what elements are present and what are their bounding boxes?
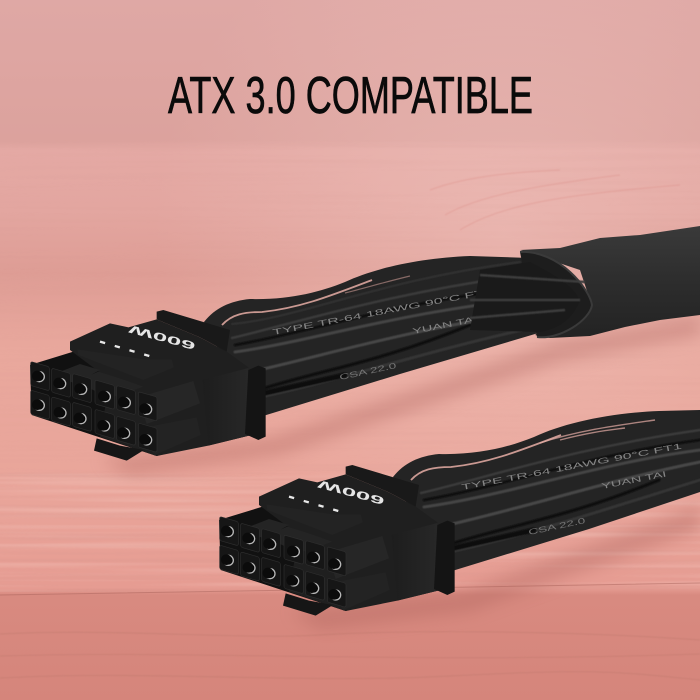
rear tab <box>346 465 419 507</box>
wire bundle <box>204 256 590 420</box>
wire printing: approval: CSA 22.0 <box>339 361 398 382</box>
shadow beneath upper cable <box>100 318 700 475</box>
label 600W: 600W <box>315 477 386 506</box>
rear tab <box>157 310 230 352</box>
wire printing: approval: CSA 22.0 <box>528 516 587 537</box>
connector <box>219 465 455 616</box>
lower latch tab <box>283 593 333 616</box>
lower latch tab <box>94 438 144 461</box>
pin holes <box>223 527 341 600</box>
heat-shrink sleeve <box>470 226 700 338</box>
wire printing: TYPE TR-64 18AWG 90°C FT1 <box>461 441 684 492</box>
shadow beneath lower cable <box>290 505 700 630</box>
pin holes <box>34 372 152 445</box>
wire bundle <box>393 410 700 575</box>
pin cells <box>31 361 157 452</box>
side housings <box>327 536 389 579</box>
wire printing: maker: YUAN TAI <box>601 470 667 491</box>
collar flange <box>434 521 455 595</box>
rear body <box>70 319 252 456</box>
title: ATX 3.0 COMPATIBLE <box>168 67 533 125</box>
latch <box>77 349 174 380</box>
side housings <box>138 381 200 424</box>
wire printing: maker: YUAN TAI <box>412 315 478 336</box>
collar flange <box>245 366 266 440</box>
latch <box>266 504 363 535</box>
pin cells <box>220 516 346 607</box>
upper cable <box>30 226 700 461</box>
housing <box>30 351 205 456</box>
wire printing: TYPE TR-64 18AWG 90°C FT1 <box>272 286 495 337</box>
lower cable <box>219 410 700 616</box>
label 600W: 600W <box>126 322 197 351</box>
rear body <box>259 474 441 611</box>
connector <box>30 310 266 461</box>
housing <box>219 506 394 611</box>
